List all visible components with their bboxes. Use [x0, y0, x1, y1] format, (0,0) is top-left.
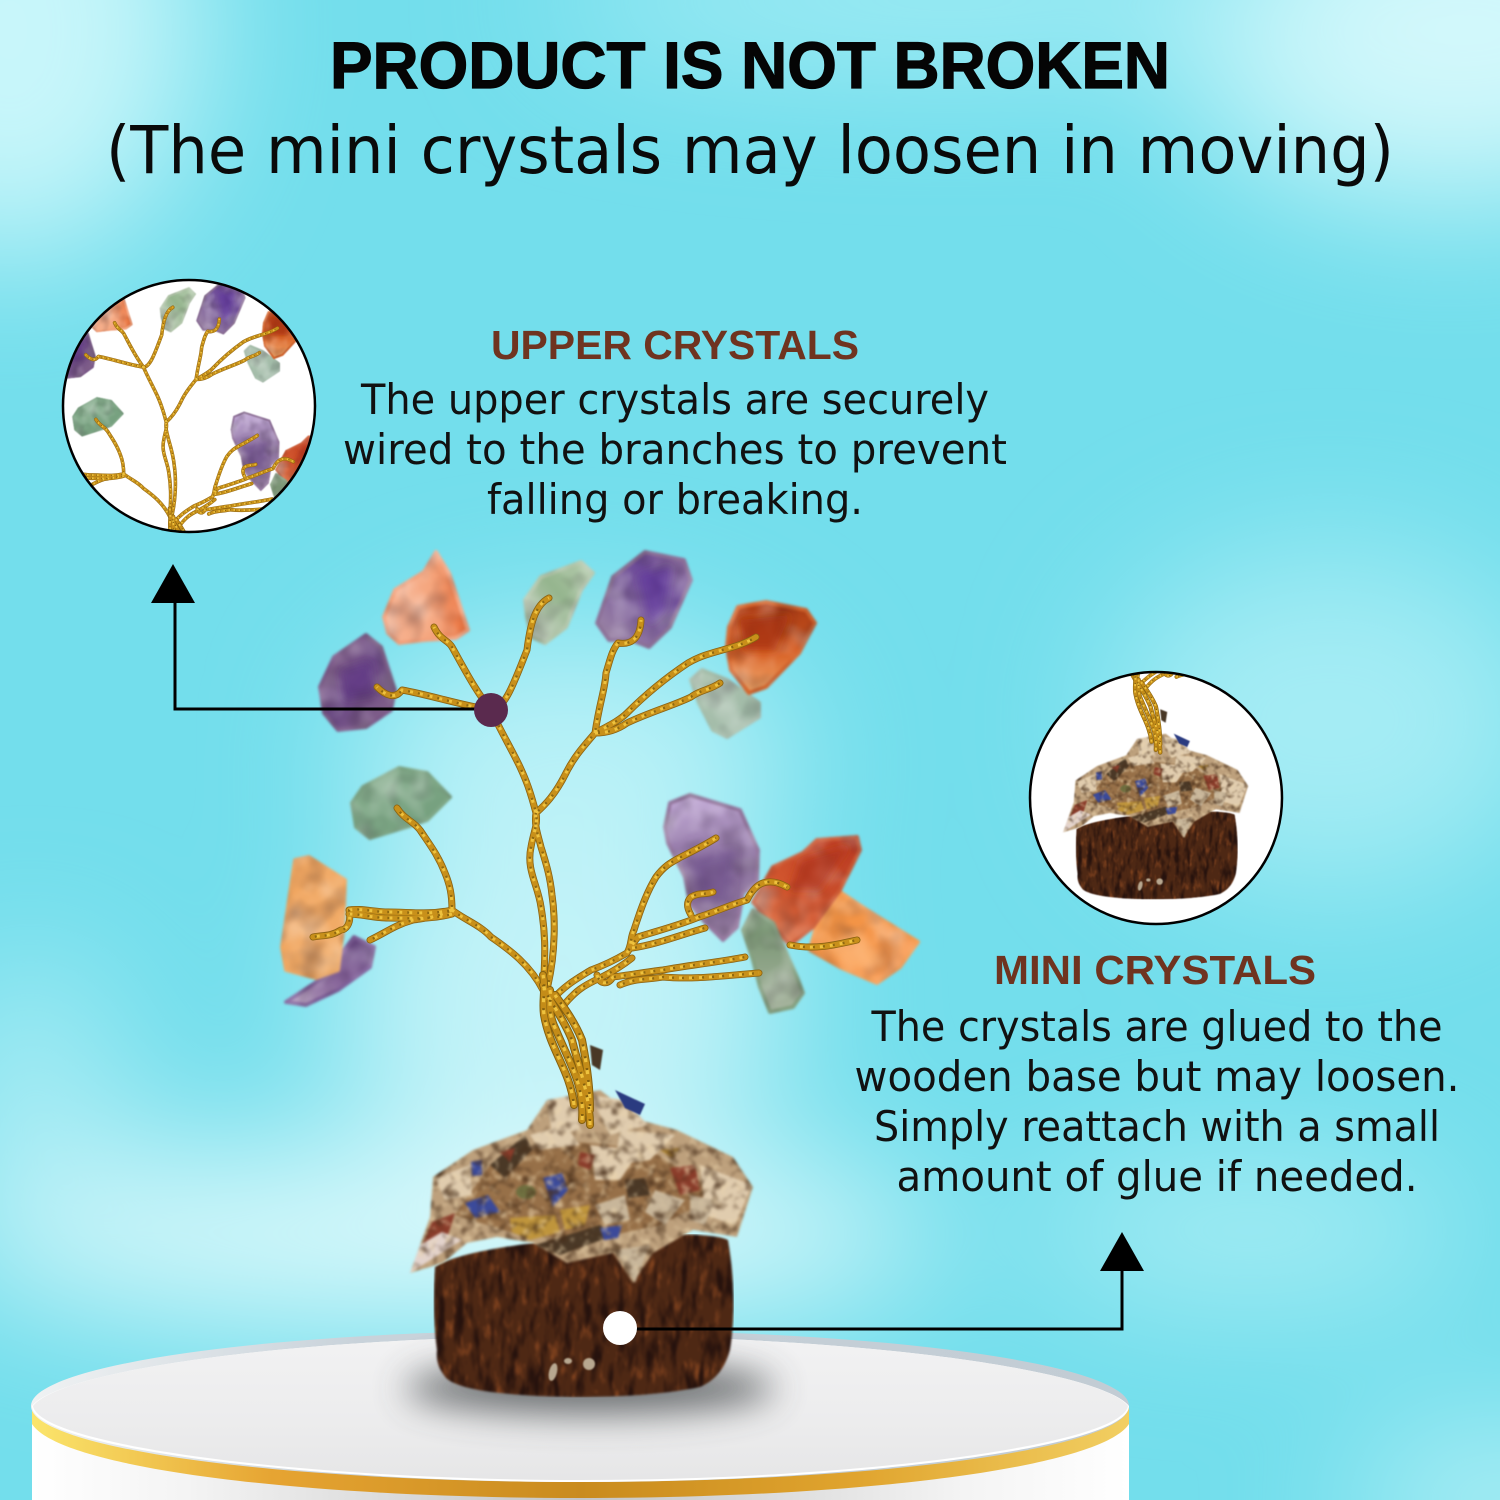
text block: upper crystals: [343, 322, 1007, 524]
inset: mini crystals: [1028, 670, 1284, 926]
description: mini crystals: [854, 1002, 1460, 1201]
description: upper crystals: falling or breaking.: [487, 475, 863, 524]
description: mini crystals: The crystals are glued to the: [871, 1002, 1442, 1051]
heading: upper crystals: UPPER CRYSTALS: [491, 322, 859, 368]
pedestal: [31, 1330, 1129, 1500]
heading: mini crystals: MINI CRYSTALS: [994, 947, 1316, 993]
description: upper crystals: wired to the branches to prevent: [343, 425, 1007, 474]
title: PRODUCT IS NOT BROKEN: [330, 28, 1170, 102]
inset: upper crystals: [38, 280, 360, 734]
title: [106, 28, 1394, 189]
callout: upper crystals marker and arrow: [151, 564, 508, 727]
description: upper crystals: [343, 375, 1007, 524]
description: mini crystals: wooden base but may loosen.: [854, 1052, 1460, 1101]
description: upper crystals: The upper crystals are securely: [360, 375, 989, 424]
callout: mini crystals marker and arrow: [603, 1232, 1144, 1345]
description: mini crystals: Simply reattach with a small: [874, 1102, 1440, 1151]
text block: mini crystals: [854, 947, 1460, 1201]
title: (The mini crystals may loosen in moving): [106, 112, 1394, 189]
tree: [282, 552, 918, 1397]
description: mini crystals: amount of glue if needed.: [896, 1152, 1418, 1201]
